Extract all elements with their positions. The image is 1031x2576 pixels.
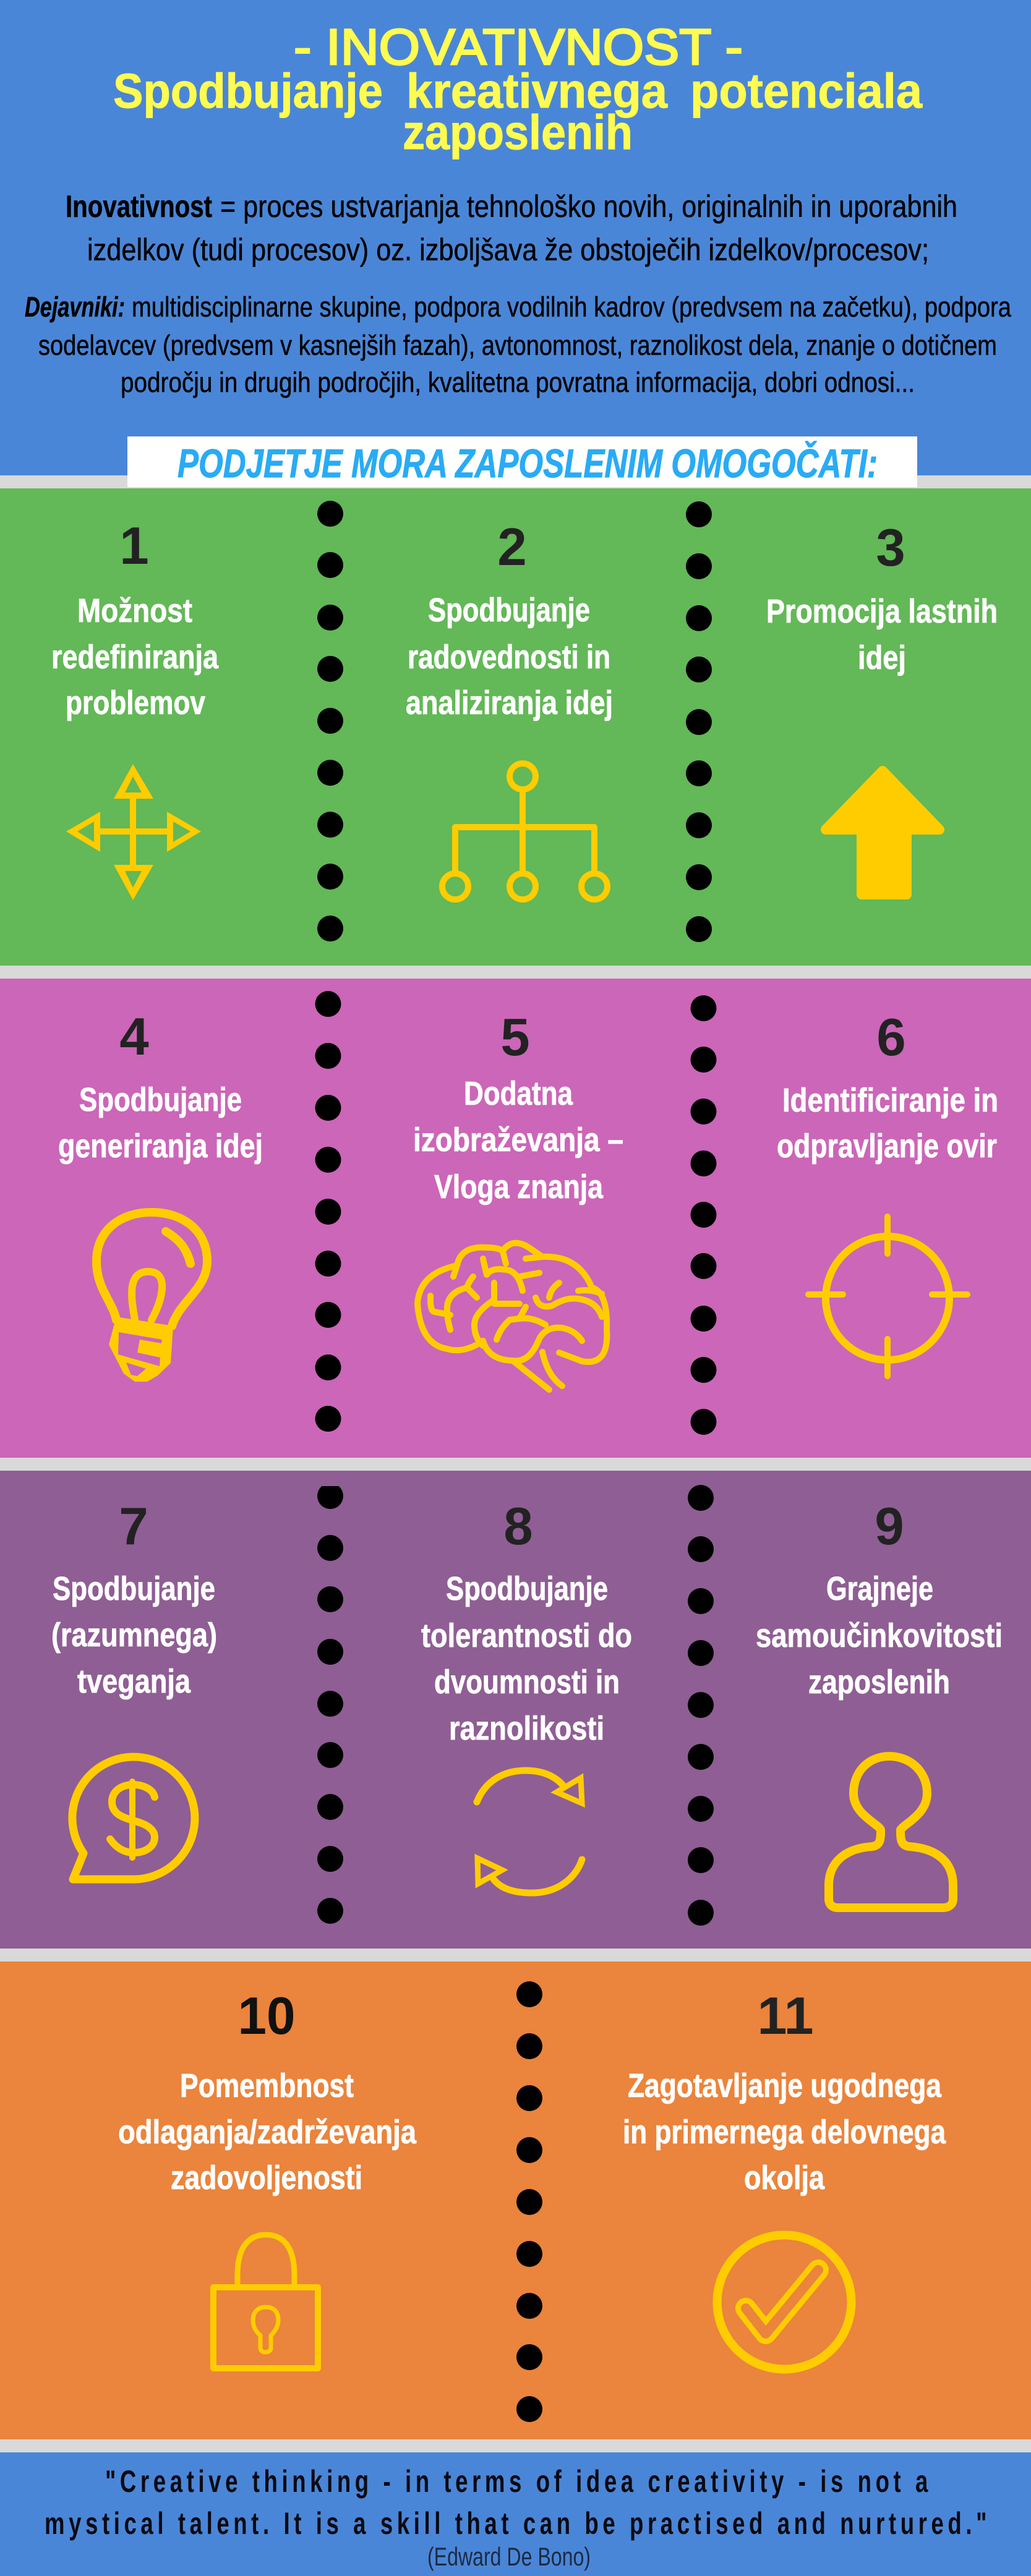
number 10: 10 [237,1987,296,2046]
title: kreativnega [406,63,668,118]
text block: definition [66,189,957,267]
number 9: 9 [875,1497,904,1556]
label 9: Grajneje [826,1570,933,1607]
label 8: Spodbujanje [446,1570,608,1607]
number 5: 5 [500,1008,530,1067]
text block: factors: področju in drugih področjih, kvalitetna povratna informacija, dobri odnosi... [121,367,915,398]
dotted divider right [686,501,712,942]
label 8 [421,1570,632,1747]
label 11: Zagotavljanje ugodnega [628,2067,942,2104]
label 7 [51,1570,217,1700]
icon: brain [417,1243,607,1390]
quote text [45,2464,991,2541]
label 1 [51,592,219,721]
panel: quote [0,2452,1031,2576]
label 1: Možnost [77,592,192,629]
label 6 [777,1082,998,1165]
text block: definition: Inovativnost [66,189,212,224]
panel: green row, items 1 to 3 [0,488,1031,966]
panel: purple row, items 7 to 9 [0,1471,1031,1949]
label 10: odlaganja/zadrževanja [118,2114,417,2151]
label 1: problemov [66,684,205,721]
title [113,19,923,159]
panel: header [0,0,1031,475]
label 10 [118,2067,417,2196]
label 5: Vloga znanja [434,1168,604,1205]
label 7: (razumnega) [51,1617,217,1654]
dotted divider left [315,991,341,1432]
label 4 [58,1081,263,1165]
icon: up arrow [826,771,939,895]
label 3: idej [858,639,906,676]
label 6: Identificiranje in [782,1082,998,1119]
label 7: tveganja [77,1663,191,1700]
number 4: 4 [119,1008,149,1066]
label 2 [406,592,613,721]
label 2: radovednosti in [408,639,610,676]
label 8: dvoumnosti in [434,1664,620,1701]
label 11: okolja [744,2159,825,2196]
icon: cycle arrows [477,1770,582,1893]
icon: light bulb [96,1212,207,1382]
label 2: analiziranja idej [406,684,613,721]
label 7: Spodbujanje [53,1570,215,1607]
icon: hierarchy [442,763,607,899]
dotted divider right [690,995,716,1435]
label 9: zaposlenih [808,1664,950,1701]
text block: factors: Dejavniki: [25,291,125,323]
text block: definition: izdelkov (tudi procesov) oz. izboljšava že obstoječih izdelkov/procesov; [87,232,929,267]
label 3 [766,593,998,676]
panel: orange row, items 10 and 11 [0,1962,1031,2439]
label 11 [623,2067,946,2196]
label 8: tolerantnosti do [421,1617,632,1654]
label 4: Spodbujanje [79,1081,242,1118]
dotted divider [516,1981,542,2422]
label 1: redefiniranja [51,639,219,676]
label 11: in primernega delovnega [623,2114,946,2151]
dotted divider left [317,501,343,942]
dotted divider left [317,1483,343,1924]
number 6: 6 [876,1008,906,1067]
title: zaposlenih [403,104,633,159]
text block: factors [25,291,1012,398]
dotted divider right [688,1485,714,1926]
icon: check in circle [717,2235,851,2369]
label 10: Pomembnost [180,2067,354,2104]
icon: four-way arrows [66,764,201,900]
number 11: 11 [757,1987,814,2046]
number 7: 7 [119,1497,148,1556]
icon: crosshair [808,1217,967,1376]
label 2: Spodbujanje [428,592,590,629]
number 8: 8 [503,1497,533,1556]
title: Spodbujanje [113,63,383,118]
icon: person [829,1756,953,1908]
title: potenciala [690,63,923,118]
number 3: 3 [876,519,905,577]
title: - INOVATIVNOST - [294,19,743,75]
label 5: Dodatna [464,1075,573,1112]
number 2: 2 [497,518,527,577]
label 5: izobraževanja – [413,1121,623,1158]
label 4: generiranja idej [58,1128,263,1165]
panel: pink row, items 4 to 6 [0,979,1031,1458]
label 5 [413,1075,623,1205]
label 9 [756,1570,1003,1701]
number 1: 1 [119,517,149,576]
quote attribution: (Edward De Bono) [427,2542,591,2571]
label 10: zadovoljenosti [171,2159,362,2196]
label 8: raznolikosti [449,1710,604,1747]
icon: dollar speech bubble [72,1757,195,1879]
icon: padlock [213,2235,318,2368]
